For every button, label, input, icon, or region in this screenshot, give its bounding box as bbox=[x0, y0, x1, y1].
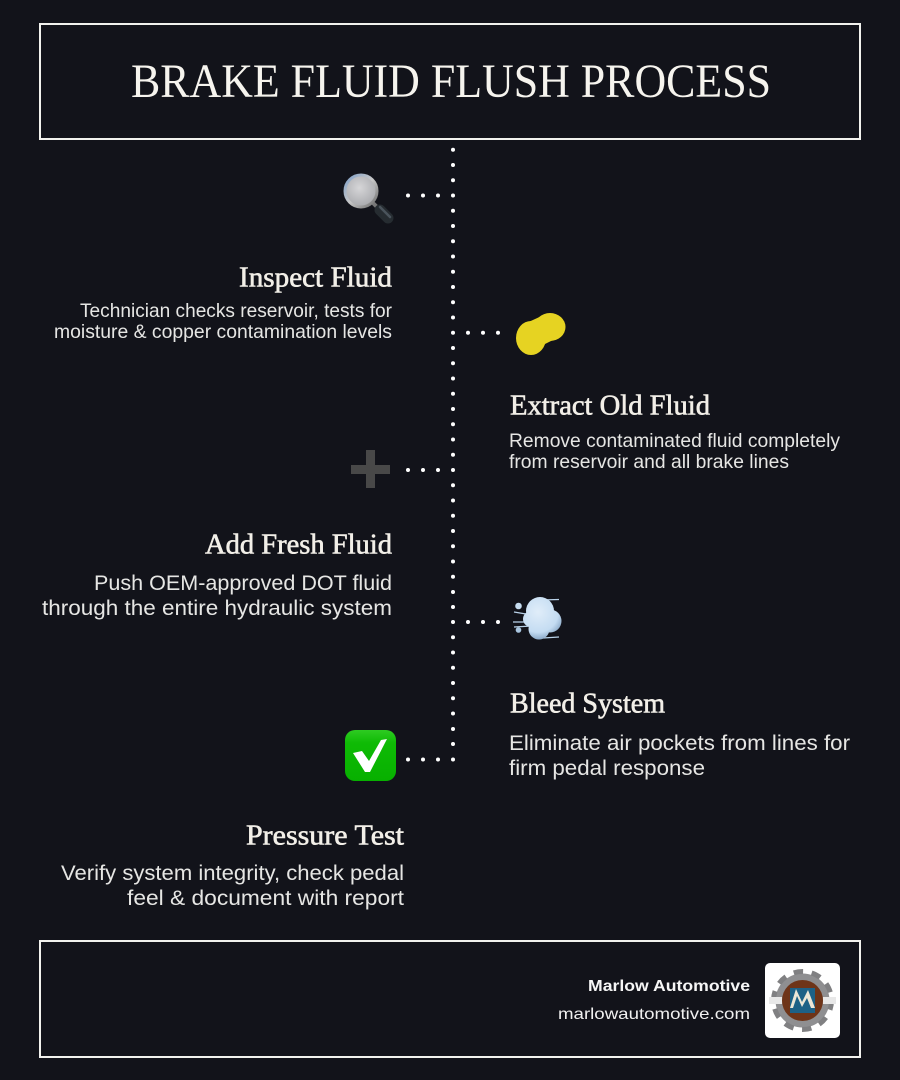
step 3: Add Fresh Fluid: Push OEM-approved DOT fluid bbox=[94, 571, 392, 595]
step 3: Add Fresh Fluid: through the entire hydraulic system bbox=[42, 596, 392, 620]
step 1: Inspect Fluid: Technician checks reservoir, tests for bbox=[80, 300, 392, 322]
step 3: Add Fresh Fluid: Add Fresh Fluid bbox=[205, 530, 392, 560]
icon: sponge bbox=[516, 313, 566, 355]
step 1: Inspect Fluid: moisture & copper contamination levels bbox=[54, 321, 392, 343]
timeline: dotted line bbox=[406, 148, 500, 761]
step 1: Inspect Fluid: Inspect Fluid bbox=[239, 262, 392, 294]
step 2: Extract Old Fluid: Extract Old Fluid bbox=[510, 390, 710, 422]
icon: plus bbox=[351, 450, 390, 488]
step 5: Pressure Test bbox=[61, 820, 404, 910]
step 4: Bleed System bbox=[509, 688, 850, 780]
step 2: Extract Old Fluid: from reservoir and all brake lines bbox=[509, 451, 789, 473]
step 2: Extract Old Fluid: Remove contaminated fluid completely bbox=[509, 430, 840, 452]
icon: dash cloud bbox=[513, 597, 562, 640]
step 4: Bleed System: Bleed System bbox=[510, 688, 665, 720]
title banner bbox=[40, 24, 860, 139]
footer: company name: Marlow Automotive bbox=[588, 978, 750, 995]
step 4: Bleed System: firm pedal response bbox=[509, 756, 705, 780]
icon: green check mark bbox=[345, 730, 396, 781]
icon: magnifying glass bbox=[345, 175, 390, 218]
step 5: Pressure Test: feel & document with report bbox=[127, 886, 404, 910]
step 1: Inspect Fluid bbox=[54, 262, 392, 343]
footer: website: marlowautomotive.com bbox=[558, 1006, 750, 1023]
step 2: Extract Old Fluid bbox=[509, 390, 840, 473]
step 4: Bleed System: Eliminate air pockets from lines for bbox=[509, 731, 850, 755]
step 3: Add Fresh Fluid bbox=[42, 530, 392, 620]
logo: gear badge bbox=[765, 963, 840, 1038]
footer panel bbox=[40, 941, 860, 1057]
step 5: Pressure Test: Pressure Test bbox=[246, 820, 404, 852]
step 5: Pressure Test: Verify system integrity, check pedal bbox=[61, 861, 404, 885]
title banner: BRAKE FLUID FLUSH PROCESS bbox=[131, 55, 771, 108]
